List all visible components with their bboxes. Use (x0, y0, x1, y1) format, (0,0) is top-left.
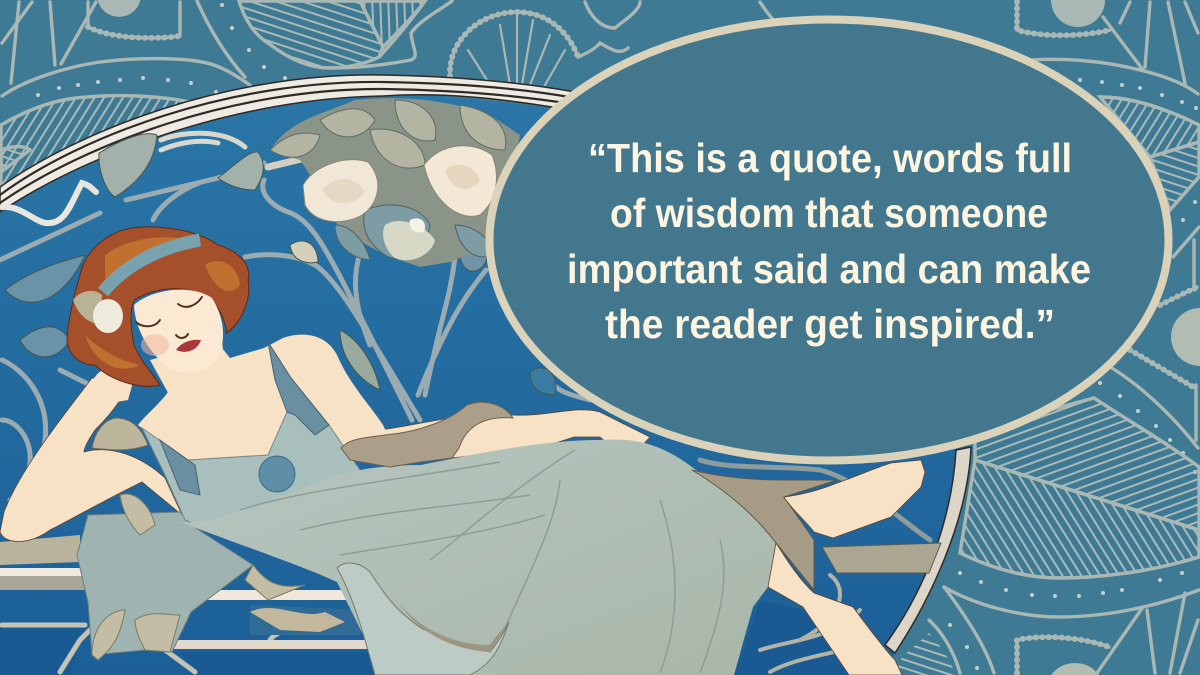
vines and branches (0, 133, 930, 672)
hair band (103, 240, 200, 292)
draped shawl (77, 512, 253, 655)
top-left hatched leaves (1, 1, 452, 190)
sash over arm (341, 402, 513, 467)
hair highlight and curls (85, 237, 240, 369)
top-right hub (1017, 0, 1198, 94)
beige fold (398, 602, 509, 652)
shawl folds (92, 494, 305, 660)
leaves and buds (5, 134, 556, 395)
flower cluster (270, 98, 520, 267)
face (134, 290, 223, 372)
neck (150, 340, 228, 400)
right hatched leaf (1100, 97, 1199, 257)
bench seat (0, 535, 941, 649)
woman (0, 227, 925, 675)
sleeve (92, 418, 148, 450)
bent arm (0, 378, 182, 542)
quote text (567, 135, 1091, 347)
quote text: of wisdom that someone (610, 190, 1048, 236)
chest and shoulders (138, 335, 395, 470)
dotted ring bottom (950, 573, 1182, 668)
bodice (142, 342, 360, 530)
dotted ring right (1100, 383, 1195, 472)
lower dark panels (0, 600, 880, 675)
skirt folds (240, 450, 724, 673)
top fan ornament (450, 2, 815, 85)
main skirt (180, 439, 776, 675)
quote text: important said and can make (567, 246, 1091, 292)
extended arm (380, 410, 650, 465)
hand at head (92, 366, 135, 405)
quote text: “This is a quote, words full (588, 135, 1072, 181)
dotted ring top-right (1080, 80, 1196, 220)
top-left hub (2, 0, 250, 96)
cheek (141, 334, 169, 356)
blue bodice rosettes (160, 342, 329, 495)
leg sash (692, 470, 837, 590)
raised foot (784, 460, 925, 538)
lower leg (768, 543, 902, 675)
quote speech ellipse (490, 20, 1168, 460)
bottom hub (895, 587, 1198, 675)
front drape (337, 563, 509, 675)
hair (67, 227, 249, 386)
rosette (259, 456, 295, 492)
quote text: the reader get inspired.” (605, 301, 1055, 347)
right hub (1112, 240, 1200, 448)
bottom-right hatched leaf (944, 398, 1199, 617)
hair flower (73, 291, 123, 333)
dotted ring top-left (38, 5, 285, 95)
ornate bench arch (0, 75, 971, 675)
closed eyes and nose (136, 297, 202, 338)
mouth (176, 340, 201, 352)
